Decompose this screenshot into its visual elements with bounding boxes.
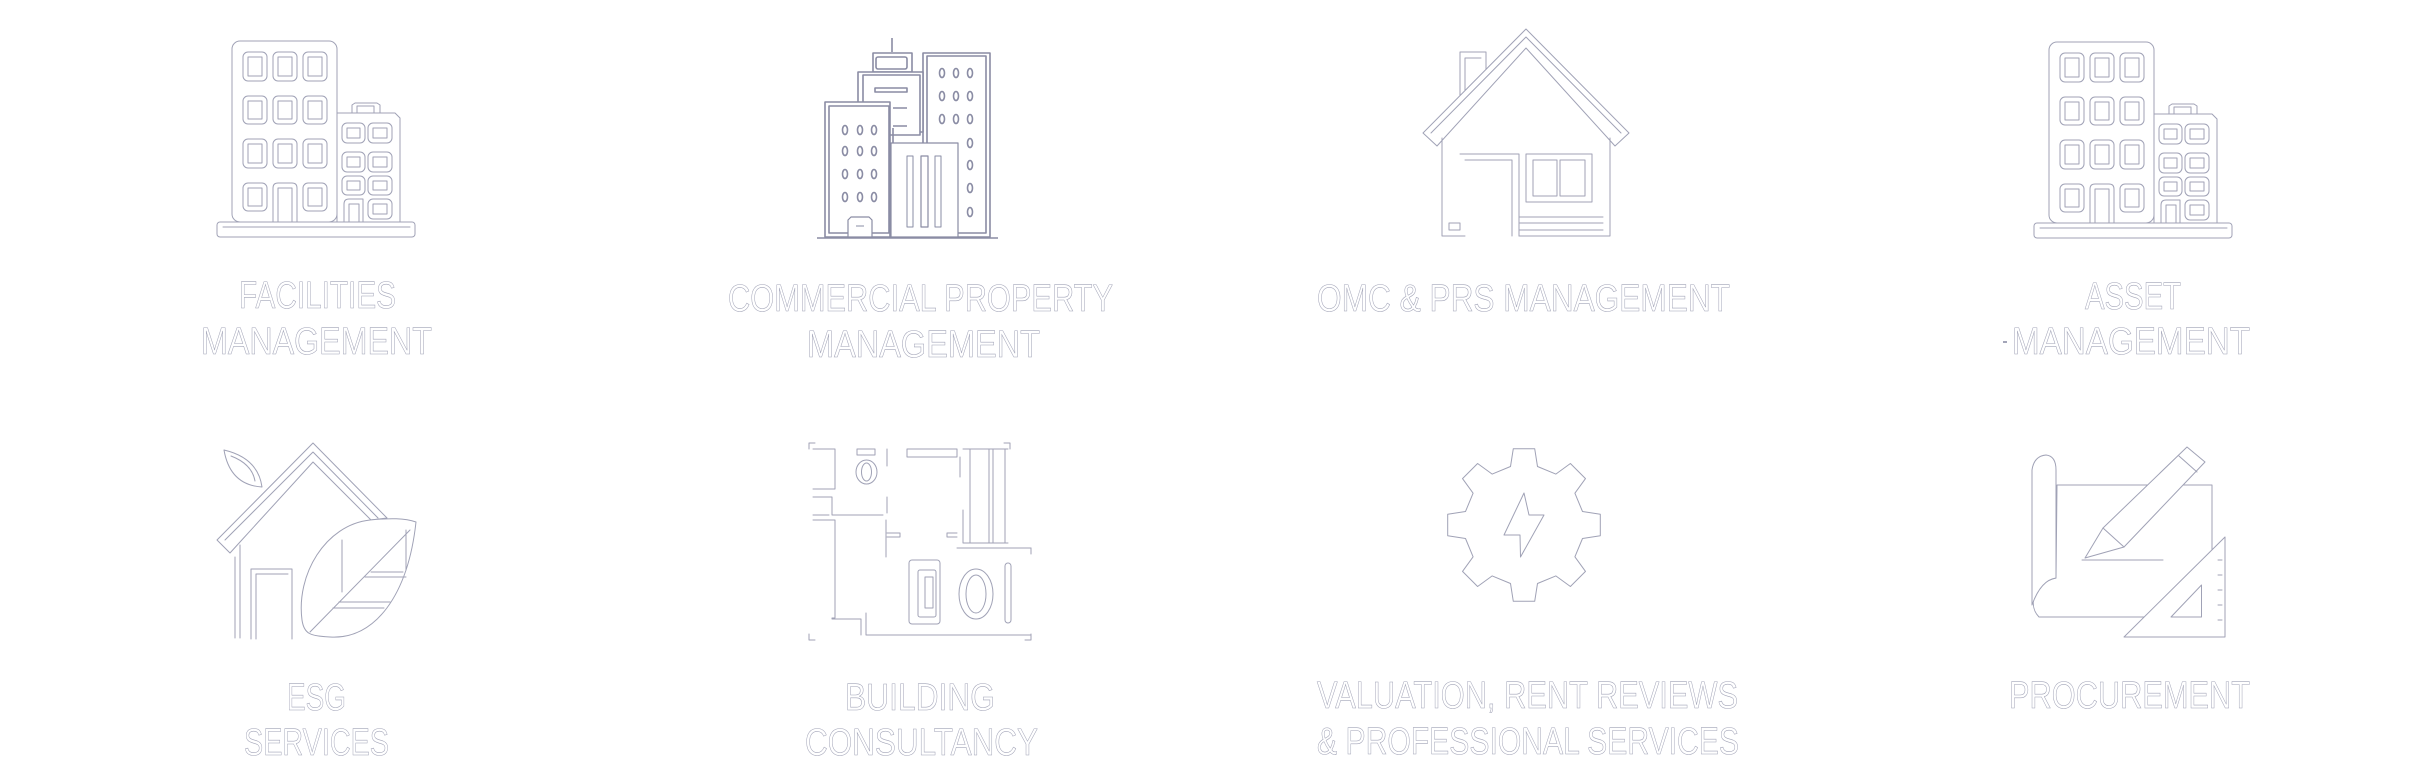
- icon: house: [1423, 29, 1629, 236]
- icon: floor plan: [809, 443, 1031, 640]
- label: valuation, rent reviews and professional services: & PROFESSIONAL SERVICES: [1317, 721, 1739, 763]
- label: facilities management: FACILITIES: [239, 275, 396, 317]
- label: valuation, rent reviews and professional services: VALUATION, RENT REVIEWS: [1317, 675, 1738, 717]
- icon: plan, pencil and set square: [2032, 447, 2225, 637]
- label: building consultancy: BUILDING: [845, 677, 995, 719]
- panel: facilities management: [201, 41, 432, 363]
- label: esg services: SERVICES: [244, 722, 389, 764]
- panel: procurement: [2009, 447, 2250, 717]
- label: esg services: [244, 677, 389, 764]
- label: facilities management: [201, 275, 432, 363]
- icon: office block: [217, 41, 415, 237]
- label: omc and prs management: OMC & PRS MANAGEMENT: [1317, 278, 1730, 320]
- panel: building consultancy: [805, 443, 1038, 764]
- label: building consultancy: CONSULTANCY: [805, 722, 1038, 764]
- label: asset management: ASSET: [2085, 276, 2181, 318]
- icon: city towers: [817, 38, 998, 238]
- panel: asset management: [2003, 42, 2250, 363]
- label: commercial property management: MANAGEMENT: [807, 324, 1040, 366]
- label: esg services: ESG: [287, 677, 346, 719]
- icon: eco house: [217, 443, 416, 639]
- label: procurement: PROCUREMENT: [2009, 675, 2250, 717]
- label: asset management: MANAGEMENT: [2012, 321, 2250, 363]
- panel: valuation, rent reviews and professional services: [1317, 449, 1739, 763]
- icon: gear with bolt: [1448, 449, 1600, 601]
- label: facilities management: MANAGEMENT: [201, 321, 432, 363]
- panel: omc and prs management: [1317, 29, 1730, 320]
- label: asset management: [2003, 276, 2250, 363]
- panel: commercial property management: [728, 38, 1113, 366]
- icon: office block: [2034, 42, 2232, 238]
- panel: esg services: [217, 443, 416, 764]
- label: building consultancy: [805, 677, 1038, 764]
- label: commercial property management: COMMERCIAL PROPERTY: [728, 278, 1113, 320]
- label: commercial property management: [728, 278, 1113, 366]
- label: valuation, rent reviews and professional services: [1317, 675, 1739, 763]
